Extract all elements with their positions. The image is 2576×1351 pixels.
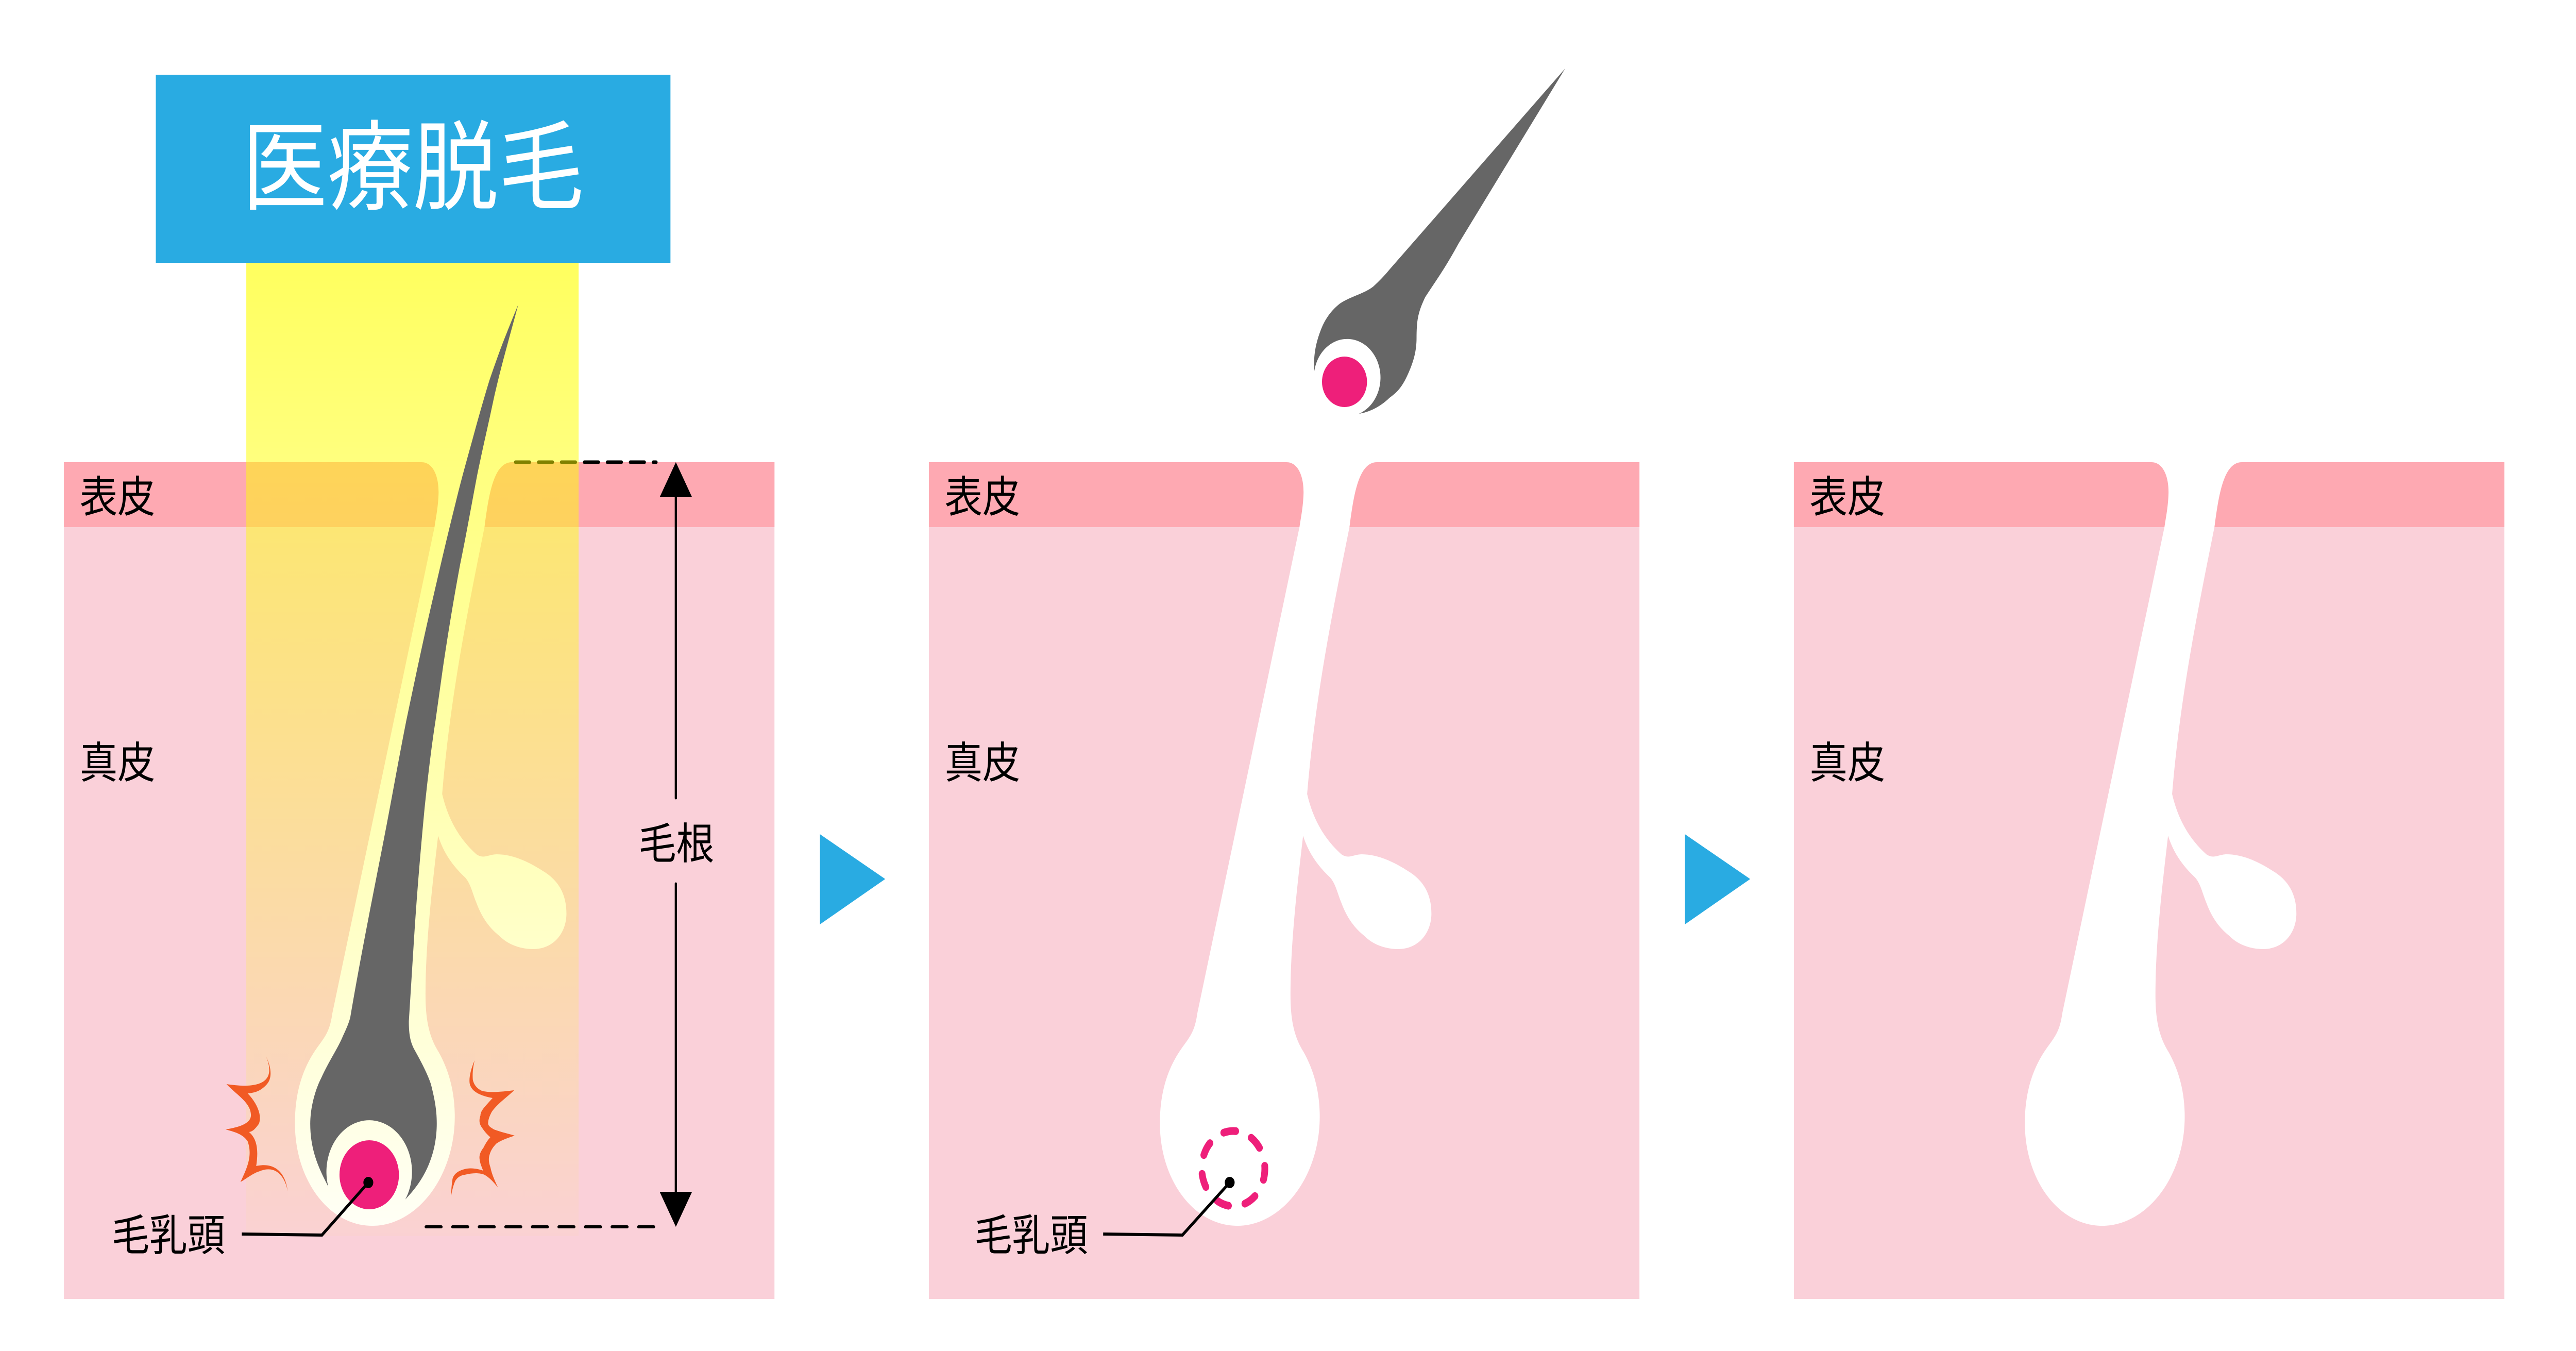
label: papilla: 毛乳頭 xyxy=(974,1211,1088,1260)
label: papilla: 毛乳頭 xyxy=(112,1211,225,1260)
panel: step 3 empty follicle xyxy=(1794,462,2504,1299)
panel: step 1 laser irradiation xyxy=(64,75,774,1299)
title banner xyxy=(156,75,670,263)
label: epidermis: 表皮 xyxy=(80,473,156,521)
dermis layer xyxy=(64,462,774,1299)
label: dermis: 真皮 xyxy=(1809,739,1885,787)
destroyed papilla: dashed outline xyxy=(1199,1128,1267,1209)
hair shaft xyxy=(310,305,518,1200)
empty hair follicle xyxy=(2025,462,2296,1226)
label: dermis: 真皮 xyxy=(945,739,1020,787)
label: hair root: 毛根 xyxy=(638,820,714,868)
epidermis layer xyxy=(1794,462,2504,527)
epidermis layer xyxy=(64,462,774,527)
dashed guide: skin surface xyxy=(516,461,656,464)
panel: step 2 hair removed, papilla destroyed xyxy=(929,69,1639,1299)
epidermis layer xyxy=(929,462,1639,527)
dimension arrow: hair root xyxy=(659,462,692,1227)
dermal papilla xyxy=(340,1140,399,1209)
extracted hair shaft xyxy=(1314,69,1565,414)
label: dermis: 真皮 xyxy=(80,739,156,787)
dashed guide: root bottom xyxy=(426,1225,664,1228)
leader line: papilla xyxy=(1103,1177,1234,1235)
label: epidermis: 表皮 xyxy=(1809,473,1885,521)
extracted papilla xyxy=(1322,357,1367,407)
hair follicle with sebaceous gland xyxy=(295,462,566,1226)
arrow: step 1 to step 2 xyxy=(820,834,885,924)
heat mark: right xyxy=(451,1060,515,1196)
label: epidermis: 表皮 xyxy=(945,473,1020,521)
laser light beam xyxy=(246,263,579,1236)
empty hair follicle xyxy=(1160,462,1431,1226)
heat mark: left xyxy=(226,1056,287,1191)
leader line: papilla xyxy=(242,1177,374,1235)
dermis layer xyxy=(1794,462,2504,1299)
title: 医療脱毛 xyxy=(242,113,584,223)
dermis layer xyxy=(929,462,1639,1299)
arrow: step 2 to step 3 xyxy=(1685,834,1750,924)
